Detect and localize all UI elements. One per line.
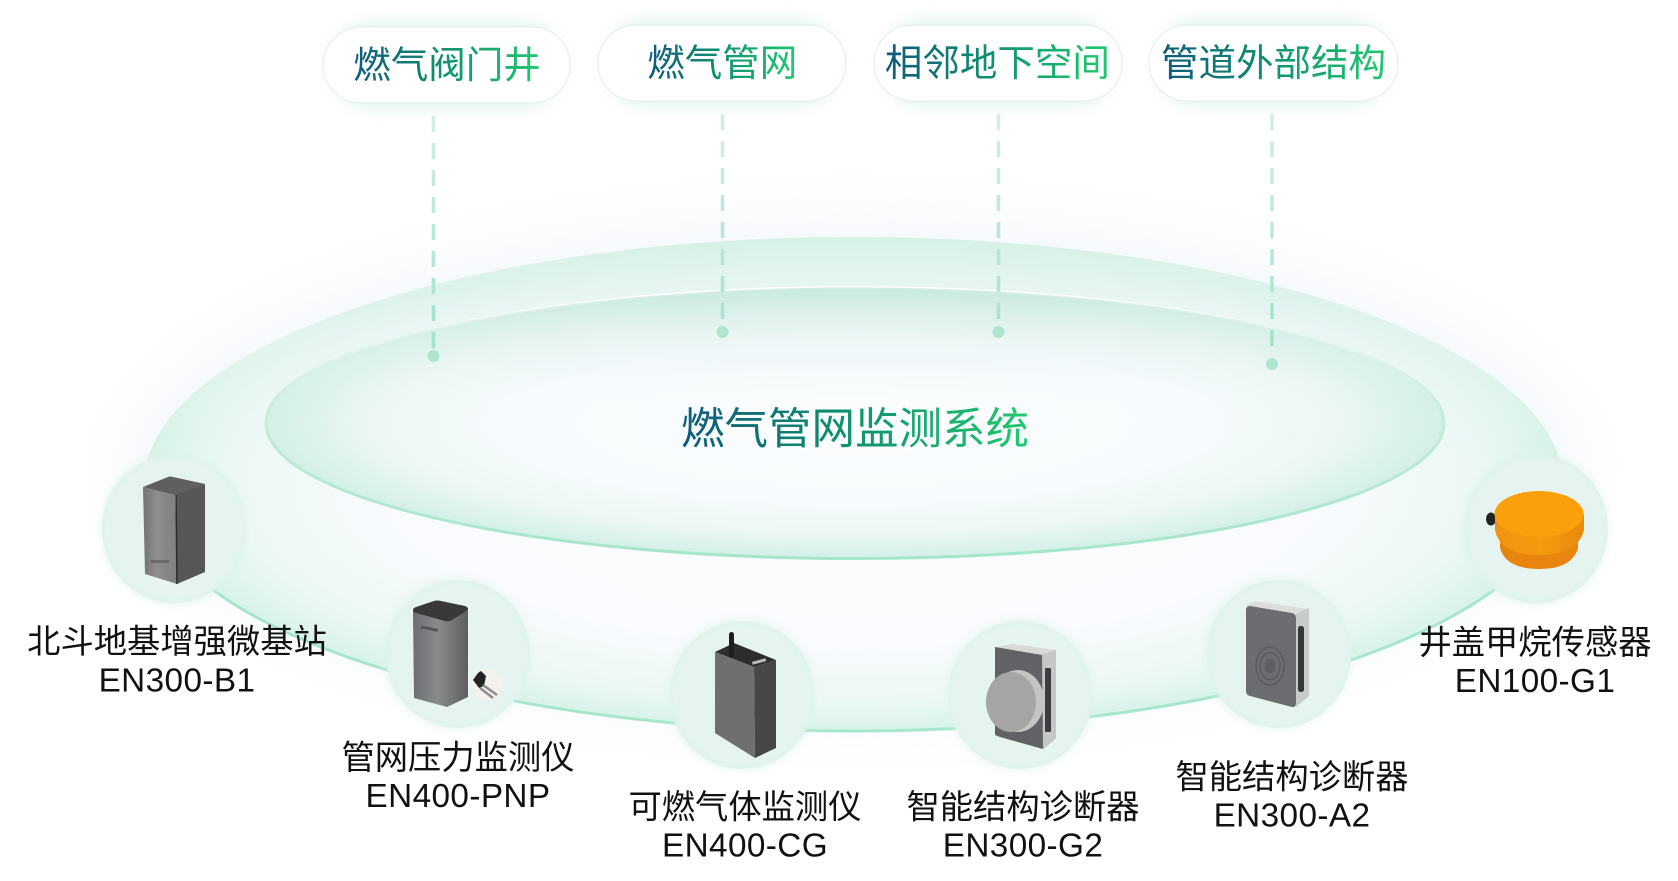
- connector: pipeline external structure: [1266, 114, 1278, 370]
- pill: valve well: [323, 22, 570, 108]
- pill: valve well: 燃气阀门井: [353, 44, 541, 86]
- label: EN100-G1: 井盖甲烷传感器: [1418, 625, 1652, 662]
- label: EN100-G1: EN100-G1: [1455, 663, 1615, 700]
- label: EN300-B1: EN300-B1: [99, 662, 255, 700]
- connector: adjacent underground space: [992, 114, 1004, 338]
- label: EN300-G2: EN300-G2: [943, 828, 1103, 864]
- device: EN300-G2 structure diagnostics: [946, 619, 1094, 771]
- label: EN400-PNP: EN400-PNP: [366, 778, 550, 815]
- label: EN300-B1: 北斗地基增强微基站: [27, 624, 327, 661]
- device: EN300-A2 structure diagnostics: [1204, 578, 1352, 730]
- device: EN400-PNP pressure monitor: [383, 578, 531, 730]
- label: EN300-A2: EN300-A2: [1214, 798, 1370, 834]
- pill: adjacent underground space: 相邻地下空间: [885, 42, 1110, 84]
- device: EN100-G1 manhole methane sensor: [1461, 453, 1609, 605]
- label: EN300-A2: 智能结构诊断器: [1175, 760, 1409, 796]
- pill: adjacent underground space: [874, 20, 1122, 106]
- pill: pipeline external structure: [1149, 20, 1398, 106]
- connector: gas network: [716, 114, 728, 338]
- device: EN300-B1 base station: [100, 453, 248, 605]
- pill: gas network: [598, 20, 846, 106]
- label: EN400-PNP: 管网压力监测仪: [341, 740, 575, 777]
- platform: outer ellipse: [118, 208, 1588, 732]
- platform: inner ellipse: [266, 288, 1444, 558]
- title: central system name: 燃气管网监测系统: [681, 406, 1029, 454]
- label: EN400-CG: EN400-CG: [662, 828, 828, 864]
- label: EN300-G2: 智能结构诊断器: [906, 790, 1140, 826]
- label: EN400-CG: 可燃气体监测仪: [628, 790, 862, 826]
- connector: valve well: [428, 116, 440, 362]
- pill: gas network: 燃气管网: [647, 42, 797, 84]
- device: EN400-CG combustible gas monitor: [668, 619, 816, 771]
- pill: pipeline external structure: 管道外部结构: [1161, 42, 1386, 84]
